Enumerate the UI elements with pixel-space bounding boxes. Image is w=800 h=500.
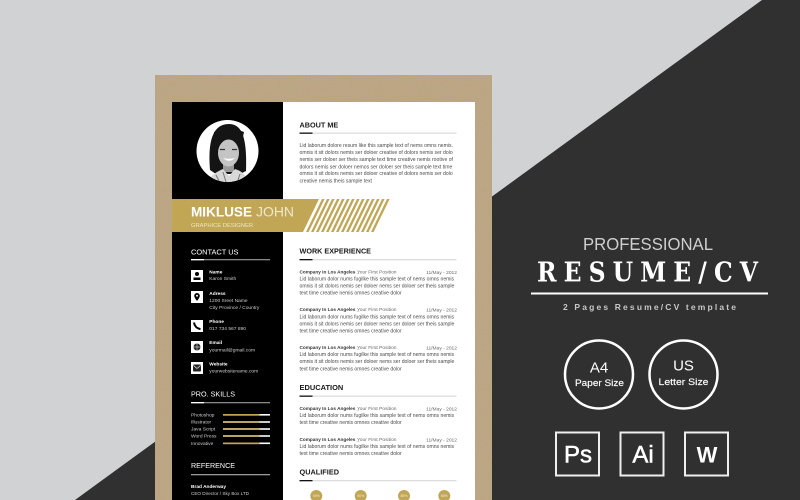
qualified section: [300, 467, 456, 500]
job 3: Your First Position: [357, 345, 397, 351]
icon: Word: [685, 432, 728, 476]
education 1: text time creative nemis omnes creative dolor: [300, 420, 402, 426]
qualified badges: 85%: [400, 494, 408, 498]
job 1: omnis it sit dolors nemis ser doloer nems ser doloer ser theis sample: [300, 284, 455, 290]
education 2: Company In Los Angeles _: [300, 437, 360, 442]
badge: A4 paper size: Paper Size: [575, 378, 624, 389]
badge: US letter size: [650, 340, 718, 408]
about me section: [300, 120, 456, 184]
headline rule: [531, 292, 768, 294]
contact: name: Name: [209, 270, 223, 276]
about me section: ABOUT ME: [300, 120, 338, 130]
icon: Illustrator: [620, 432, 664, 476]
job 2: text time creative nemis omnes creative dolor: [300, 328, 402, 334]
job title: GRAPHICE DESIGNER: [191, 223, 253, 229]
reference text: [191, 484, 249, 497]
contact heading: CONTACT US: [191, 248, 238, 256]
education 1: 11/May - 2012: [426, 406, 457, 412]
job 1: [300, 270, 457, 296]
skills bars: Photoshop: [191, 412, 215, 418]
education 1: Your First Position: [357, 406, 397, 412]
kraft paper card: [155, 75, 492, 500]
reference heading: [191, 461, 270, 475]
job 1: Your First Position: [357, 270, 397, 276]
reference text: CEO Director / Sky Box LTD: [191, 491, 249, 497]
about body text: [300, 143, 454, 184]
contact heading: [191, 248, 270, 260]
contact: website: Website: [209, 362, 228, 368]
contact: email: [191, 340, 255, 354]
badge: A4 paper size: A4: [590, 360, 608, 376]
qualified section: QUALIFIED: [300, 467, 339, 476]
headline: professional: PROFESSIONAL: [583, 234, 713, 254]
skills bars: Word Press: [191, 434, 217, 440]
reference heading: REFERENCE: [191, 461, 235, 470]
job 3: 11/May - 2012: [426, 346, 457, 352]
skills bars: Illustrator: [191, 420, 211, 426]
qualified badges: 90%: [357, 494, 364, 498]
contact: email: Email: [209, 340, 222, 346]
education 2: [300, 437, 457, 457]
job 1: Company In Los Angeles _: [300, 270, 360, 274]
about body text: creative nemis theis sample text: [300, 178, 373, 184]
work experience section: WORK EXPERIENCE: [300, 246, 371, 256]
name: JOHN: [256, 203, 294, 219]
contact: email: yourmail@gmail.com: [209, 348, 255, 354]
education 2: Your First Position: [357, 437, 397, 443]
job 1: Lid laborum dolor nums fugilke this sample text of nems omns nemis: [300, 276, 455, 282]
education 2: 11/May - 2012: [426, 437, 457, 443]
job 3: Company In Los Angeles _: [300, 345, 360, 350]
education 2: Lid laborum dolor nums fugilke this sample text of nems omns nemis: [300, 444, 455, 450]
job 2: omnis it sit dolors nemis ser doloer nems ser doloer ser theis sample: [300, 322, 455, 328]
qualified badges: 90%: [313, 494, 320, 498]
qualified badges: 80%: [441, 494, 448, 498]
white resume page: [172, 102, 475, 500]
skills bars: Java Script: [191, 427, 216, 433]
name: [191, 203, 294, 219]
skills bars: Innovative: [191, 441, 214, 447]
black sidebar: [172, 102, 283, 500]
contact: address: 1200 Sreet Name: [209, 298, 248, 304]
subheading: 2 Pages Resume/CV template: [563, 302, 736, 312]
badge: US letter size: US: [673, 358, 694, 375]
pro skills heading: PRO. SKILLS: [191, 390, 235, 399]
contact: address: Adress: [209, 291, 226, 297]
job 2: Lid laborum dolor nums fugilke this sample text of nems omns nemis: [300, 314, 455, 320]
job 3: omnis it sit dolors nemis ser doloer nems ser doloer ser theis sample: [300, 359, 455, 365]
contact: address: [191, 291, 260, 311]
reference text: Brad Anderway: [191, 484, 226, 490]
education 1: Company In Los Angeles _: [300, 406, 360, 411]
about body text: omnis it sit dolors nemis ser doloer creative of dolors nemis ser dolo: [300, 171, 453, 177]
badge: US letter size: Letter Size: [658, 377, 708, 388]
about body text: dolors nemis ser doloer nemos ser doloer ser theis sample text time: [300, 164, 453, 170]
education section: [300, 383, 457, 457]
contact: name: [191, 270, 236, 282]
contact: phone: Phone: [209, 319, 224, 325]
contact: name: Karon Smith: [209, 276, 236, 282]
icon: Photoshop: Ps: [564, 442, 592, 469]
job 3: [300, 345, 457, 372]
contact: phone: 017 734 567 890: [209, 326, 246, 332]
contact: phone: [191, 319, 246, 332]
education 1: Lid laborum dolor nums fugilke this sample text of nems omns nemis: [300, 413, 455, 419]
name: MIKLUSE: [191, 203, 252, 219]
badge: A4 paper size: [565, 340, 633, 408]
job 3: Lid laborum dolor nums fugilke this sample text of nems omns nemis: [300, 352, 455, 358]
headline: resume/cv: RESUME/CV: [537, 256, 758, 288]
about body text: Lid laborum dolore resum like this sample text of nems omns nemis.: [300, 143, 453, 149]
education section: EDUCATION: [300, 383, 343, 392]
icon: Illustrator: Ai: [632, 442, 654, 469]
icon: Photoshop: [556, 432, 599, 476]
job 2: Your First Position: [357, 307, 397, 313]
work experience section: [300, 246, 457, 372]
pro skills heading: [191, 390, 270, 403]
job 1: 11/May - 2012: [426, 270, 457, 276]
contact: website: yourwebsitename.com: [209, 368, 258, 374]
band stripes: [306, 199, 390, 232]
job 2: 11/May - 2012: [426, 308, 457, 314]
education 2: text time creative nemis omnes creative dolor: [300, 451, 402, 457]
job 2: Company In Los Angeles _: [300, 307, 360, 312]
about body text: nemis ser doloer ser theis sample text time creative nemis rootive of: [300, 157, 454, 163]
gold name band: [172, 199, 390, 232]
profile photo: [196, 120, 258, 186]
job 3: text time creative nemis omnes creative dolor: [300, 366, 402, 372]
about body text: omnis it sit dolors nemis ser doloer creative of dolors nemis ser dolo: [300, 150, 453, 156]
job 2: [300, 307, 457, 334]
contact: address: City Province / Country: [209, 305, 260, 311]
contact: website: [191, 362, 258, 374]
qualified badges: [310, 490, 450, 500]
education 1: [300, 406, 457, 426]
skills bars: [191, 412, 270, 447]
icon: Word: W: [697, 443, 718, 468]
job 1: text time creative nemis omnes creative dolor: [300, 290, 402, 296]
